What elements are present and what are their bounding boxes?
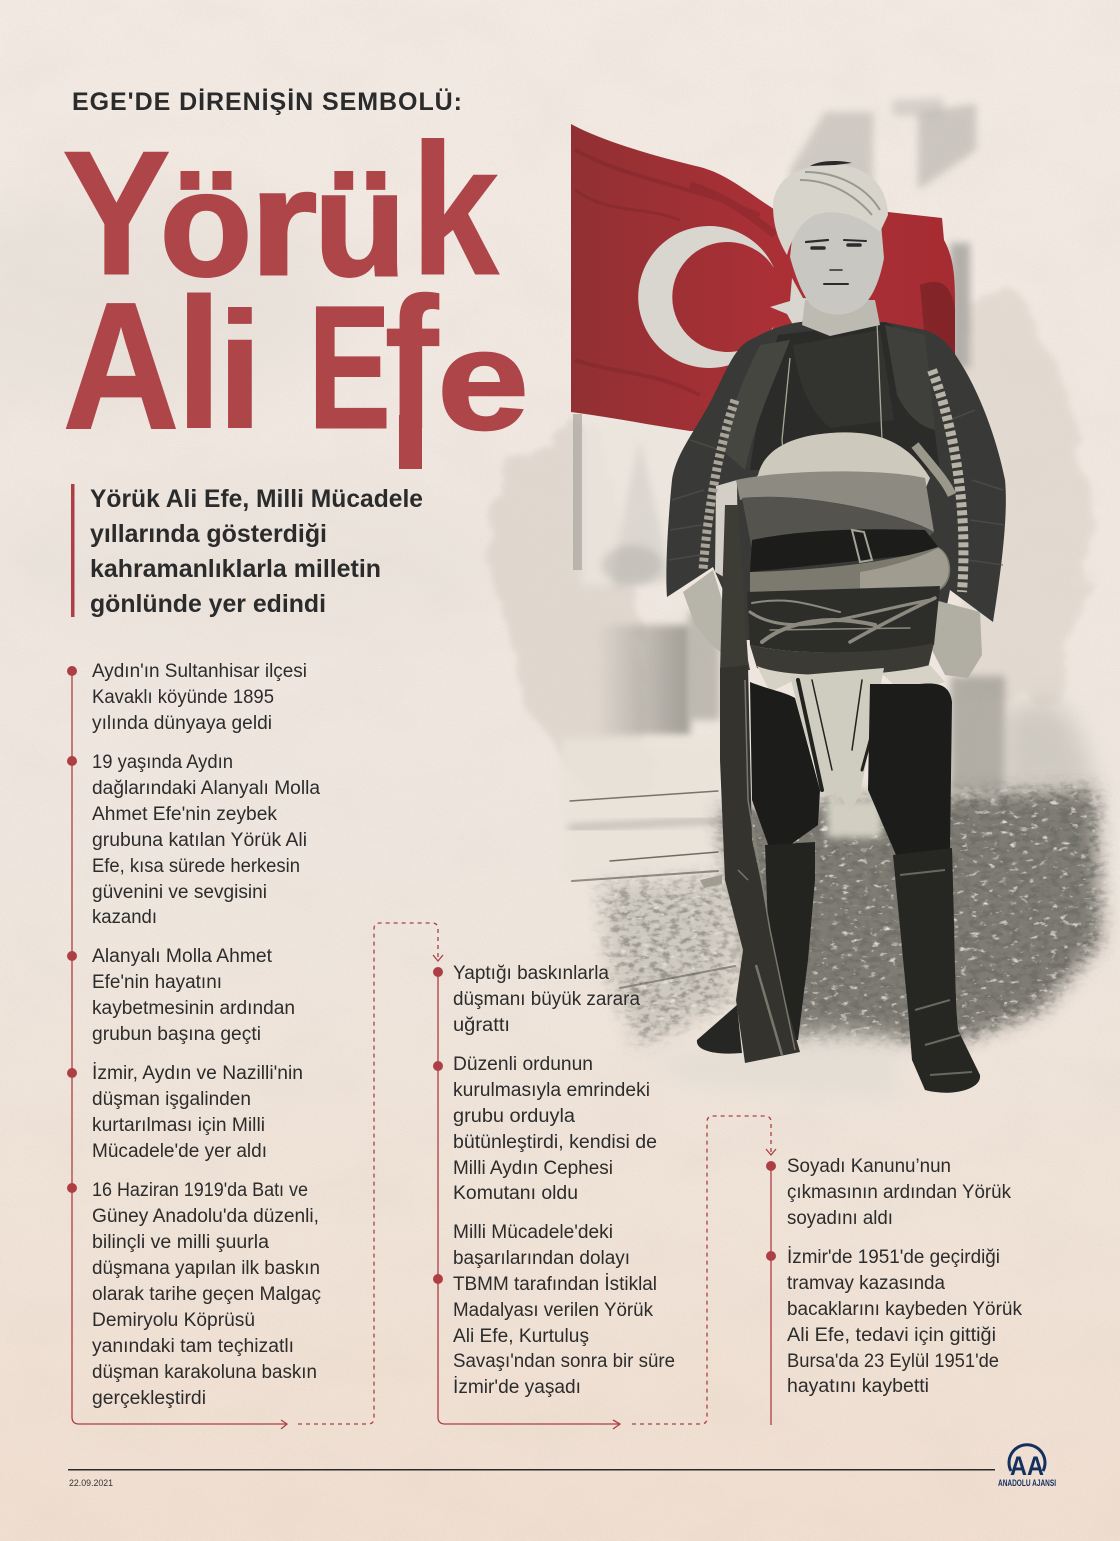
bullet: Malgaç raid: Güney Anadolu'da düzenli, [92, 1206, 319, 1227]
main title: e [437, 301, 529, 460]
lanyards [782, 322, 884, 470]
bullet: birth: Aydın'ın Sultanhisar ilçesi [92, 661, 307, 682]
ruffle [750, 643, 934, 676]
main title: ö [160, 142, 252, 307]
logo: Anadolu Ajansı: ANADOLU AJANSI [998, 1478, 1056, 1488]
bullet: Malgaç raid: yanındaki tam teçhizatlı [92, 1336, 294, 1357]
bullet: death: İzmir'de 1951'de geçirdiği [787, 1247, 1000, 1268]
main title: r [250, 138, 317, 306]
hands [683, 570, 742, 664]
date: 22.09.2021 [69, 1478, 113, 1488]
kicker heading: EGE'DE DİRENİŞİN SEMBOLÜ: [72, 87, 462, 116]
crescent [638, 226, 774, 368]
lead paragraph: Yörük Ali Efe, Milli Mücadele [90, 485, 423, 513]
watercolor stains [490, 288, 1094, 794]
bullet: Malgaç raid: 16 Haziran 1919'da Batı ve [92, 1180, 308, 1201]
bullet: death: tramvay kazasında [787, 1273, 945, 1294]
neck [802, 300, 880, 336]
bullet: raids: Yaptığı baskınlarla [453, 963, 609, 984]
bullet: death: bacaklarını kaybeden Yörük [787, 1299, 1022, 1320]
bullet: regular army: Komutanı oldu [453, 1183, 578, 1204]
right boot [893, 848, 980, 1093]
pale waist cloth [745, 432, 930, 490]
belt [750, 529, 942, 572]
bullet: Malgaç raid [67, 1180, 321, 1409]
bullet: joining the zeybek group: grubuna katılan Yörük Ali [92, 830, 307, 851]
lead paragraph: kahramanlıklarla milletin [90, 555, 381, 583]
bullet: national struggle: Mücadele'de yer aldı [92, 1141, 267, 1162]
column 3 [766, 1156, 1022, 1397]
bullet: Malgaç raid: Demiryolu Köprüsü [92, 1310, 255, 1331]
bullet: joining the zeybek group [67, 752, 320, 928]
main title: E [308, 270, 391, 466]
head [790, 212, 884, 315]
star [770, 278, 825, 325]
bullet: national struggle: kurtarılması için Milli [92, 1115, 265, 1136]
bullet: medal [433, 1222, 675, 1398]
bullet: regular army: Düzenli ordunun [453, 1054, 593, 1075]
lead paragraph [71, 484, 423, 618]
bullet: leading the group: Efe'nin hayatını [92, 972, 222, 993]
hat [773, 165, 888, 255]
bullet: joining the zeybek group: 19 yaşında Aydın [92, 752, 233, 773]
logo: Anadolu Ajansı: AA [1010, 1451, 1044, 1481]
ground texture [600, 790, 1100, 1100]
main title: i [216, 278, 264, 464]
bullet: national struggle: İzmir, Aydın ve Nazilli'nin [92, 1063, 303, 1084]
bullet: leading the group [67, 946, 295, 1045]
bullet: surname: Soyadı Kanunu’nun [787, 1156, 951, 1177]
bullet: Malgaç raid: gerçekleştirdi [92, 1388, 206, 1409]
bullet: medal: Ali Efe, Kurtuluş [453, 1326, 589, 1347]
column 2 [433, 963, 675, 1398]
bullet: death: Ali Efe, tedavi için gittiği [787, 1325, 996, 1346]
timeline connectors [72, 671, 776, 1429]
faded background photograph [562, 98, 1095, 880]
sleeve shading [669, 410, 1005, 565]
left leg [750, 682, 820, 850]
main title: f [384, 258, 439, 468]
left foot [697, 1005, 742, 1054]
bullet: birth [67, 661, 307, 734]
bullet: regular army [433, 1054, 657, 1204]
sleeve trims [703, 370, 963, 592]
bullet: regular army: bütünleştirdi, kendisi de [453, 1132, 657, 1153]
bullet: leading the group: Alanyalı Molla Ahmet [92, 946, 273, 967]
bullet: Malgaç raid: düşmana yapılan ilk baskın [92, 1258, 320, 1279]
bullet: medal: Madalyası verilen Yörük [453, 1300, 653, 1321]
bullet: surname [766, 1156, 1011, 1229]
pale gap [715, 480, 738, 585]
footer rule [68, 1469, 995, 1470]
rifle [720, 505, 750, 672]
lead paragraph: gönlünde yer edindi [90, 590, 326, 618]
holster [750, 547, 950, 592]
bullet: birth: yılında dünyaya geldi [92, 713, 272, 734]
bullet: medal: TBMM tarafından İstiklal [453, 1274, 657, 1295]
bullet: regular army: grubu orduyla [453, 1106, 575, 1127]
bullet: death [766, 1247, 1022, 1397]
bullet: leading the group: grubun başına geçti [92, 1024, 261, 1045]
bullet: surname: soyadını aldı [787, 1208, 893, 1229]
coat [666, 322, 1006, 640]
bullet: death: hayatını kaybetti [787, 1376, 929, 1397]
steps [570, 791, 735, 988]
bullet: joining the zeybek group: kazandı [92, 907, 157, 928]
baggy trousers [790, 668, 884, 812]
logo: Anadolu Ajansı [998, 1445, 1056, 1488]
Turkish flag [571, 124, 955, 431]
main title: l [175, 259, 223, 468]
bullet: Malgaç raid: düşman karakoluna baskın [92, 1362, 317, 1383]
soldier figure [666, 161, 1006, 1093]
bullet: raids [433, 963, 640, 1036]
main title: Y [62, 114, 171, 312]
bullet: medal: başarılarından dolayı [453, 1248, 630, 1269]
bullet: raids: uğrattı [453, 1015, 510, 1036]
bullet: raids: düşmanı büyük zarara [453, 989, 640, 1010]
bullet: regular army: Milli Aydın Cephesi [453, 1158, 613, 1179]
bullet: surname: çıkmasının ardından Yörük [787, 1182, 1011, 1203]
main title: A [63, 266, 179, 467]
bullet: joining the zeybek group: güvenini ve sevgisini [92, 882, 267, 903]
bullet: joining the zeybek group: dağlarındaki Alanyalı Molla [92, 778, 320, 799]
right leg [868, 684, 952, 855]
bullet: medal: Milli Mücadele'deki [453, 1222, 613, 1243]
flag pole [573, 414, 582, 570]
bullet: Malgaç raid: olarak tarihe geçen Malgaç [92, 1284, 321, 1305]
bullet: leading the group: kaybetmesinin ardından [92, 998, 295, 1019]
column 1 [67, 661, 321, 1409]
bullet: death: Bursa'da 23 Eylül 1951'de [787, 1351, 999, 1372]
lead paragraph: yıllarında gösterdiği [90, 520, 327, 548]
patterned sash [747, 586, 940, 652]
bullet: regular army: kurulmasıyla emrindeki [453, 1080, 650, 1101]
bullet: medal: İzmir'de yaşadı [453, 1377, 581, 1398]
bullet: Malgaç raid: bilinçli ve milli şuurla [92, 1232, 269, 1253]
bullet: national struggle: düşman işgalinden [92, 1089, 251, 1110]
bullet: medal: Savaşı'ndan sonra bir süre [453, 1351, 675, 1372]
main title: ü [314, 142, 406, 307]
bullet: joining the zeybek group: Ahmet Efe'nin zeybek [92, 804, 278, 825]
bullet: national struggle [67, 1063, 303, 1162]
main title [62, 105, 529, 469]
vest [750, 322, 940, 470]
grey flap [736, 471, 934, 532]
bullet: joining the zeybek group: Efe, kısa sürede herkesin [92, 856, 300, 877]
main title: k [411, 105, 500, 314]
bullet: birth: Kavaklı köyünde 1895 [92, 687, 274, 708]
